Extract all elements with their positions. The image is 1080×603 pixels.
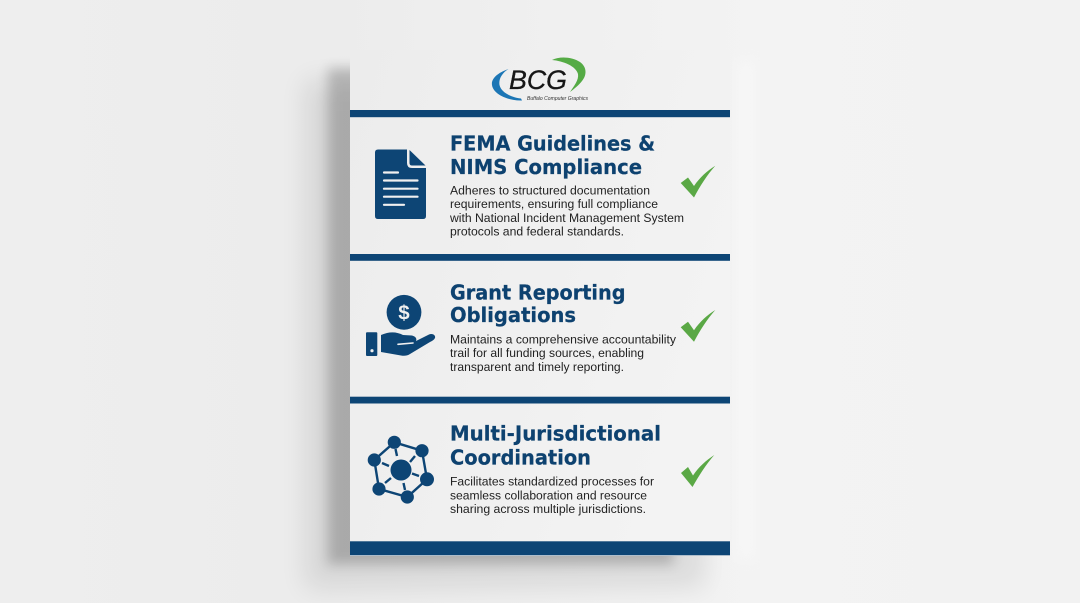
icon: hand holding dollar coin <box>366 295 435 356</box>
logo: Buffalo Computer Graphics <box>492 58 588 102</box>
panel: FEMA guidelines <box>375 132 715 238</box>
body text <box>450 332 677 374</box>
divider bars <box>350 110 730 555</box>
heading: Coordination <box>450 446 591 470</box>
panel: multi-jurisdictional coordination <box>368 422 714 516</box>
body text: sharing across multiple jurisdictions. <box>450 502 646 516</box>
icon: document <box>375 150 426 219</box>
heading: Multi-Jurisdictional <box>450 422 661 446</box>
logo: Buffalo Computer Graphics: BCG <box>509 65 567 95</box>
body text: seamless collaboration and resource <box>450 488 647 502</box>
heading: FEMA Guidelines & <box>450 132 655 156</box>
icon: check mark <box>681 455 714 487</box>
body text: Adheres to structured documentation <box>450 183 650 197</box>
body text: Facilitates standardized processes for <box>450 475 654 489</box>
body text <box>450 475 654 516</box>
body text: Maintains a comprehensive accountability <box>450 332 677 346</box>
body text: with National Incident Management System <box>449 211 684 225</box>
heading: NIMS Compliance <box>450 155 642 179</box>
logo: Buffalo Computer Graphics: Buffalo Computer Graphics <box>527 96 588 102</box>
heading <box>450 280 626 327</box>
body text: trail for all funding sources, enabling <box>450 346 644 360</box>
heading: Obligations <box>450 303 576 327</box>
body text: transparent and timely reporting. <box>450 360 624 374</box>
icon: check mark <box>681 166 715 198</box>
card shadow <box>305 60 756 588</box>
heading <box>450 132 655 179</box>
heading: Grant Reporting <box>450 280 626 304</box>
body text: requirements, ensuring full compliance <box>450 197 658 211</box>
icon: network <box>368 436 434 504</box>
icon: hand holding dollar coin: $ <box>398 302 410 324</box>
icon: check mark <box>681 310 715 342</box>
body text <box>449 183 684 238</box>
body text: protocols and federal standards. <box>450 224 624 238</box>
panel: grant reporting <box>366 280 715 374</box>
heading <box>450 422 661 470</box>
poster card <box>350 50 730 556</box>
